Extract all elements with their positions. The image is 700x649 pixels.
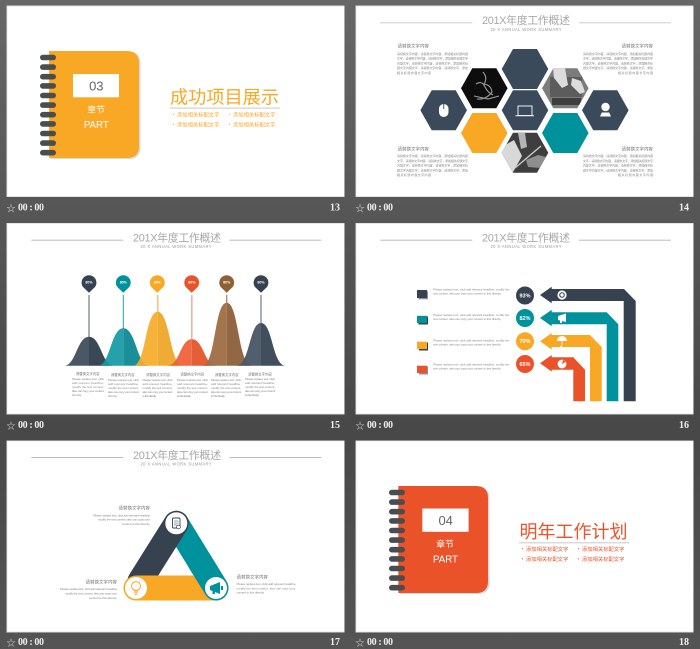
- icon: target: [557, 290, 567, 300]
- caption 3: 请替换文字内容: [146, 372, 170, 377]
- panel: slide 17: [6, 440, 344, 632]
- footer: slide 15: [6, 420, 340, 431]
- caption 6: Please replace text, click: [245, 377, 276, 381]
- caption 1: directly.: [72, 393, 82, 397]
- pin: 6: 80%: [257, 281, 265, 285]
- text block: top right: [583, 43, 653, 75]
- text block: bottom right: 内容文字，请替换文字内容，请替换文字，添加相关标: [583, 163, 653, 168]
- pin: 5: 80%: [223, 281, 231, 285]
- caption 3: Please replace text, click: [142, 378, 173, 382]
- caption 3: [142, 372, 173, 398]
- heading: 20 X ANNUAL WORK SUMMARY: [490, 244, 562, 249]
- pin: 1: [82, 275, 96, 293]
- bullet list: 添加相关标配文字: [177, 120, 219, 128]
- text block: top: [93, 505, 150, 526]
- caption 4: [177, 372, 208, 398]
- text block: bottom right: [583, 146, 653, 177]
- caption 1: also can copy your content: [72, 389, 104, 393]
- bullet list: 添加相关标配文字: [177, 110, 219, 118]
- icon: megaphone: [558, 314, 566, 323]
- caption 1: 请替换文字内容: [76, 371, 100, 376]
- text block: bottom left: 请替换文字内容，请替换文字内容，添加相关标题内容: [397, 153, 468, 158]
- caption 1: add relevant headline,: [72, 381, 104, 385]
- caption 6: to this directly.: [245, 393, 259, 397]
- bullet list: 添加相关标配文字: [526, 555, 568, 563]
- footer: slide 14: ☆: [356, 204, 365, 214]
- text block: bottom left: 相关标题内容文字内容: [397, 172, 431, 177]
- caption 3: modify the text content,: [142, 386, 173, 390]
- bullet list: 添加相关标配文字: [526, 545, 568, 553]
- row text: text content, also can copy your content to this directly.: [433, 366, 501, 370]
- node: document: [165, 512, 187, 534]
- bell: red: [167, 339, 217, 366]
- text block: top left: 请替换文字内容，请替换文字内容，添加相关标题内容: [397, 51, 468, 56]
- text block: bottom right: 题文字内容文字，请替换文字内容，请替换文字，添加: [583, 167, 653, 172]
- caption 6: add relevant headline,: [245, 381, 275, 385]
- text block: right: Please replace text, click add relevant headline: [236, 582, 296, 586]
- caption 2: Please replace text, click: [108, 378, 140, 382]
- icon: orange notebook: 03: [89, 78, 104, 94]
- bullet list: [522, 545, 624, 563]
- icon: red notebook: 章节: [436, 538, 454, 549]
- photo hexagon: black: [460, 68, 508, 109]
- caption 3: to this directly.: [142, 394, 157, 398]
- triangle cycle: [125, 512, 227, 599]
- text block: top: Please replace text, click add relevant headline: [93, 513, 150, 517]
- footer: slide 18: 00 : 00: [367, 637, 393, 648]
- caption 2: modify the text content,: [108, 386, 139, 390]
- caption 5: to this directly.: [211, 394, 225, 398]
- footer: slide 16: [356, 420, 689, 431]
- heading: [380, 230, 671, 249]
- circle: 82%: 82%: [519, 316, 531, 322]
- bullet list: [173, 110, 275, 128]
- text block: top: 请替换文字内容: [118, 505, 150, 512]
- caption 1: Please replace text, click: [72, 377, 104, 381]
- pin: 4: [184, 275, 199, 293]
- footer: slide 14: [356, 202, 689, 214]
- text block: bottom right: 请替换文字内容，请替换文字内容，添加相关标题内容: [583, 153, 653, 158]
- bell: dark 1: [64, 337, 114, 366]
- footer: slide 17: 00 : 00: [18, 637, 44, 648]
- bell: teal: [98, 328, 149, 366]
- pin: 6: [254, 275, 268, 293]
- hexagon cluster: [420, 49, 629, 174]
- caption 5: [211, 372, 242, 398]
- bullet list: 添加相关标配文字: [233, 110, 275, 118]
- pin: 2: [116, 275, 131, 293]
- text block: top: content to this directly.: [122, 522, 150, 526]
- node: lightbulb: [125, 577, 147, 599]
- text block: top right: 请替换文字内容，请替换文字内容，添加相关标题内容: [583, 51, 653, 56]
- icon: red notebook: PART: [433, 554, 458, 565]
- text block: left: content to this directly.: [89, 596, 117, 600]
- text block: bottom right: 文字，请替换文字内容，请替换文字，添加相关标题文字: [583, 158, 653, 163]
- caption 1: [72, 371, 104, 397]
- caption 5: Please replace text, click: [211, 378, 242, 382]
- pin: 5: [219, 275, 234, 293]
- heading: 20 X ANNUAL WORK SUMMARY: [140, 462, 212, 466]
- panel: slide 13: [6, 6, 344, 197]
- caption 2: also can copy your content: [108, 390, 139, 394]
- text block: top right: 相关标题内容文字内容: [618, 70, 653, 75]
- caption 4: add relevant headline,: [177, 382, 208, 386]
- footer: slide 14: 14: [679, 202, 689, 214]
- caption 5: 请替换文字内容: [215, 372, 239, 377]
- icon: orange notebook: PART: [84, 120, 109, 131]
- caption 4: to this directly.: [177, 394, 191, 398]
- panel: slide 15: [6, 223, 344, 414]
- text block: top right: 题文字内容文字，请替换文字内容，请替换文字，添加: [583, 65, 653, 70]
- footer: slide 17: [6, 637, 340, 648]
- caption 4: modify the text content,: [177, 386, 208, 390]
- text block: left: [60, 579, 117, 600]
- footer: slide 16: 16: [679, 420, 689, 431]
- bell chart: [64, 295, 286, 366]
- text block: bottom left: [397, 146, 468, 177]
- pin: 3: [150, 275, 165, 293]
- row text: text content, also can copy your content to this directly.: [433, 292, 501, 296]
- row text: [433, 288, 510, 370]
- title: 明年工作计划: [520, 522, 628, 542]
- text block: top left: 题文字内容文字，请替换文字内容，请替换文字，添加: [397, 65, 468, 70]
- arrow: orange: [540, 333, 602, 401]
- icon: pie: [558, 360, 566, 368]
- caption 4: 请替换文字内容: [180, 372, 205, 376]
- text block: top right: 文字，请替换文字内容，请替换文字，添加相关标题文字: [583, 56, 653, 61]
- icon: orange notebook: [40, 51, 140, 159]
- row text: text content, also can copy your content to this directly.: [433, 317, 501, 321]
- footer: slide 13: [6, 202, 340, 214]
- footer: slide 16: ☆: [356, 421, 365, 431]
- footer: slide 13: ☆: [6, 204, 16, 214]
- panel: slide 18: [356, 440, 694, 632]
- pin: 1: 80%: [85, 281, 93, 285]
- text block: right: content to this directly.: [236, 590, 265, 594]
- heading: [31, 448, 322, 466]
- footer: slide 13: 13: [330, 202, 340, 214]
- legend squares: [417, 290, 428, 374]
- footer: slide 18: ☆: [356, 638, 365, 648]
- arrow: teal: [540, 310, 618, 401]
- footer: slide 16: 00 : 00: [367, 420, 393, 431]
- footer: slide 14: 00 : 00: [367, 202, 393, 214]
- text block: right: [236, 574, 296, 594]
- text block: top left: 请替换文字内容: [398, 43, 429, 50]
- footer: slide 15: ☆: [6, 421, 16, 431]
- caption 2: add relevant headline,: [108, 382, 139, 386]
- text block: left: 请替换文字内容: [86, 579, 117, 586]
- row text: text content, also can copy your content to this directly.: [433, 342, 501, 346]
- caption 6: modify the text content,: [245, 385, 275, 389]
- circle: 93%: 93%: [519, 293, 531, 299]
- text block: right: modify the text content, also can copy your: [236, 586, 296, 590]
- bullet list: 添加相关标配文字: [582, 545, 624, 553]
- pin: 4: 80%: [188, 281, 196, 285]
- pins: [82, 275, 268, 293]
- text block: top right: 内容文字，请替换文字内容，请替换文字，添加相关标: [583, 60, 653, 65]
- bell: brown: [202, 303, 252, 366]
- caption 2: [108, 372, 140, 398]
- caption 1: modify the text content,: [72, 385, 104, 389]
- pin: 3: 80%: [154, 281, 162, 285]
- bullet list: 添加相关标配文字: [582, 555, 624, 563]
- text block: top right: 请替换文字内容: [622, 43, 653, 50]
- caption 5: add relevant headline,: [211, 382, 241, 386]
- bell: orange: [133, 312, 183, 366]
- icon: umbrella: [557, 336, 567, 346]
- footer: slide 17: ☆: [6, 638, 16, 648]
- caption 5: also can copy your content: [211, 390, 241, 394]
- circle: 65%: 65%: [519, 362, 531, 368]
- caption columns: [72, 371, 276, 398]
- row text: Please replace text, click add relevant headline, modify the: [433, 362, 510, 366]
- node: megaphone: [205, 577, 227, 599]
- circle: 70%: 70%: [519, 339, 531, 345]
- text block: left: Please replace text, click add relevant headline: [60, 587, 117, 591]
- heading: 201X年度工作概述: [482, 13, 570, 27]
- caption 6: 请替换文字内容: [248, 372, 272, 376]
- arrow: red: [540, 355, 585, 401]
- heading: 20 X ANNUAL WORK SUMMARY: [490, 27, 562, 32]
- text block: top: modify the text content, also can copy your: [98, 518, 150, 522]
- text block: top left: 文字，请替换文字内容，请替换文字，添加相关标题文字: [397, 56, 468, 61]
- text block: bottom left: 内容文字，请替换文字内容，请替换文字，添加相关标: [397, 163, 468, 168]
- text block: left: modify the text content, also can copy your: [65, 592, 117, 596]
- text block: bottom right: 请替换文字内容: [622, 146, 653, 153]
- caption 3: also can copy your content: [142, 390, 173, 394]
- footer: slide 18: [356, 637, 689, 648]
- footer: slide 18: 18: [679, 637, 689, 648]
- text block: top left: 相关标题内容文字内容: [397, 70, 431, 75]
- text block: bottom left: 文字，请替换文字内容，请替换文字，添加相关标题文字: [397, 158, 468, 163]
- row text: Please replace text, click add relevant headline, modify the: [433, 313, 510, 317]
- caption 6: also can copy your content: [245, 389, 275, 393]
- icon: laptop: [516, 106, 534, 116]
- heading: 20 X ANNUAL WORK SUMMARY: [140, 244, 212, 249]
- caption 4: Please replace text, click: [177, 378, 208, 382]
- text block: top left: [397, 43, 468, 75]
- icon: person: [600, 103, 611, 116]
- icon: red notebook: 04: [438, 513, 453, 528]
- caption 5: modify the text content,: [211, 386, 241, 390]
- text block: bottom left: 题文字内容文字，请替换文字内容，请替换文字，添加: [397, 167, 468, 172]
- percent circles: [516, 286, 534, 373]
- panel: slide 16: [356, 223, 694, 414]
- photo hexagon: keyboard and hands: [541, 68, 589, 109]
- heading: 201X年度工作概述: [133, 448, 221, 462]
- heading: [380, 13, 671, 32]
- heading: [31, 230, 322, 249]
- footer: slide 13: 00 : 00: [18, 202, 44, 214]
- text block: top left: 内容文字，请替换文字内容，请替换文字，添加相关标: [397, 60, 468, 65]
- text block: right: 请替换文字内容: [236, 574, 268, 581]
- footer: slide 17: 17: [330, 637, 340, 648]
- heading: 201X年度工作概述: [133, 230, 221, 244]
- title: 成功项目展示: [170, 88, 279, 108]
- caption 6: [245, 372, 276, 397]
- footer: slide 15: 00 : 00: [18, 420, 44, 431]
- caption 4: also can copy your content: [177, 390, 208, 394]
- heading: 201X年度工作概述: [482, 230, 570, 244]
- pin: 2: 80%: [120, 281, 128, 285]
- bullet list: 添加相关标配文字: [233, 120, 275, 128]
- arrow: dark: [540, 287, 636, 401]
- caption 3: add relevant headline,: [142, 382, 173, 386]
- caption 2: directly.: [108, 394, 118, 398]
- panel: slide 14: [356, 6, 694, 197]
- row text: Please replace text, click add relevant headline, modify the: [433, 288, 510, 292]
- text block: bottom right: 相关标题内容文字内容: [618, 172, 653, 177]
- photo hexagon: hands and pen: [500, 132, 550, 174]
- caption 2: 请替换文字内容: [111, 372, 135, 377]
- icon: orange notebook: 章节: [87, 104, 105, 114]
- icon: mouse: [439, 104, 448, 117]
- bell: dark 2: [236, 323, 286, 366]
- text block: bottom left: 请替换文字内容: [398, 146, 429, 153]
- row text: Please replace text, click add relevant headline, modify the: [433, 338, 510, 342]
- footer: slide 15: 15: [330, 420, 340, 431]
- stems: [89, 295, 261, 340]
- icon: red notebook: [389, 486, 490, 594]
